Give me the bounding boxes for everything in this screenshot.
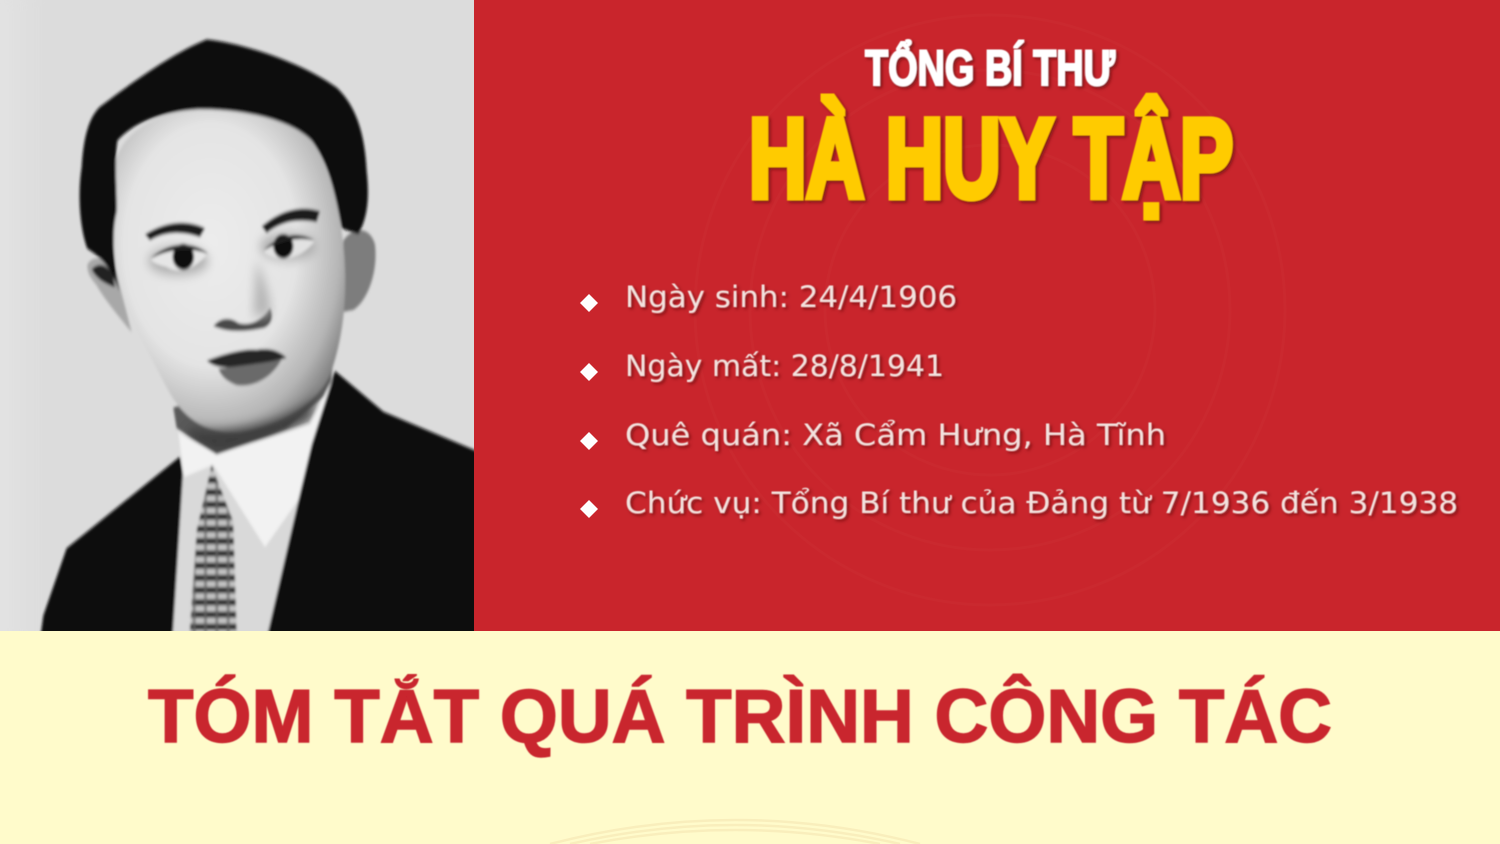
- collar: [178, 377, 333, 547]
- emblem pattern: [695, 15, 1285, 605]
- suit right: [266, 369, 474, 631]
- emblem arcs: [550, 820, 920, 844]
- bullet: birth date: Ngày sinh: 24/4/1906: [625, 280, 957, 314]
- tie: [188, 465, 237, 652]
- bullet: death date: Ngày mất: 28/8/1941: [625, 349, 944, 383]
- face: [113, 109, 345, 432]
- bullet: position: Chức vụ: Tổng Bí thư của Đảng từ 7/1936 đến 3/1938: [625, 486, 1458, 520]
- eyebrows: [145, 209, 320, 241]
- panel: cream section: [0, 631, 1500, 844]
- ear inner: [92, 265, 115, 287]
- suit left: [38, 457, 184, 652]
- mouth: [207, 349, 287, 367]
- bullet list: profile facts: [580, 280, 1458, 520]
- neck: [173, 359, 333, 455]
- icon: right ear: [343, 230, 376, 312]
- title: TỔNG BÍ THƯ: TỔNG BÍ THƯ: [865, 39, 1115, 96]
- chin shadow: [187, 395, 320, 453]
- right eye: [263, 237, 315, 259]
- nose: [213, 308, 272, 331]
- left eye: [150, 247, 207, 271]
- heading: TÓM TẮT QUÁ TRÌNH CÔNG TÁC: TÓM TẮT QUÁ TRÌNH CÔNG TÁC: [148, 674, 1332, 758]
- shirt: [170, 468, 300, 631]
- hair: [80, 40, 368, 291]
- panel: red profile panel: [474, 0, 1500, 631]
- eye sockets: [148, 247, 208, 275]
- bullet: hometown: Quê quán: Xã Cẩm Hưng, Hà Tĩnh: [625, 418, 1166, 452]
- icon: left ear: [87, 258, 132, 332]
- title: HÀ HUY TẬP: HÀ HUY TẬP: [749, 96, 1233, 221]
- panel: portrait photo: [0, 0, 480, 670]
